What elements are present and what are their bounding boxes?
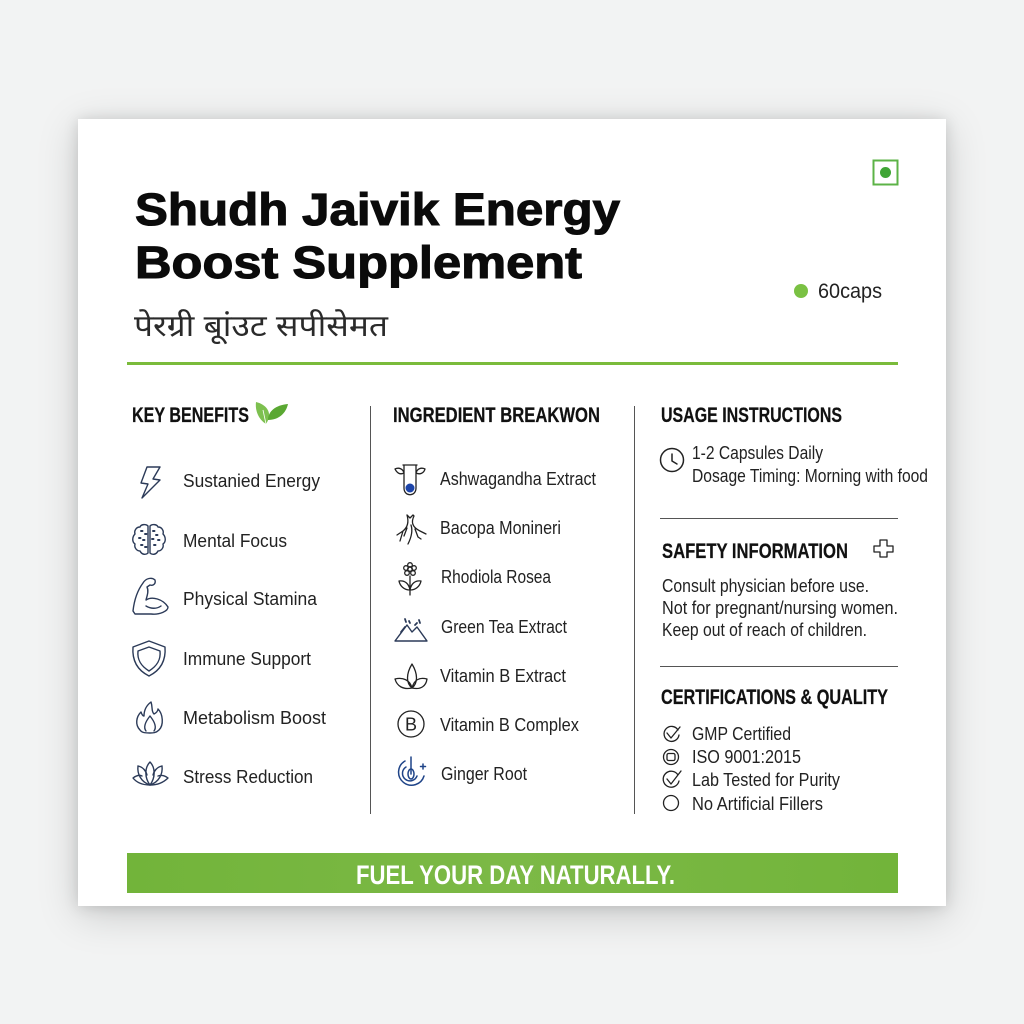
panel: ingredient breakdown — [393, 404, 600, 785]
banner: FUEL YOUR DAY NATURALLY. — [356, 860, 675, 890]
icon: iso seal — [664, 750, 678, 764]
cert: gmp: GMP Certified — [692, 723, 791, 744]
icon: lightning bolt — [141, 467, 160, 498]
heading: usage instructions: USAGE INSTRUCTIONS — [661, 404, 842, 427]
icon: ginger target — [399, 757, 426, 785]
usage text: Dosage Timing: Morning with food — [692, 465, 928, 486]
icon: flexed arm — [133, 578, 168, 614]
title — [135, 184, 620, 288]
heading: key benefits: KEY BENEFITS — [132, 404, 249, 427]
icon: leaves — [256, 402, 288, 424]
icon: vegetarian mark — [874, 160, 898, 184]
panel: safety information — [662, 540, 898, 640]
icon: roots — [397, 515, 426, 544]
icon: vitamin B circle: B — [405, 714, 417, 734]
panel: label card — [78, 119, 946, 906]
ingredient: vitamin b extract: Vitamin B Extract — [440, 665, 566, 686]
icon: medical cross — [874, 540, 893, 557]
icon: flask with leaves — [395, 465, 425, 495]
ingredient: vitamin b complex: Vitamin B Complex — [440, 714, 580, 735]
heading: ingredient breakdown: INGREDIENT BREAKWON — [393, 404, 600, 427]
safety text: Not for pregnant/nursing women. — [662, 597, 898, 618]
icon: check circle — [664, 726, 680, 741]
panel: key benefits — [132, 402, 326, 787]
capsule count: 60caps — [818, 280, 882, 303]
ingredient: green tea: Green Tea Extract — [441, 616, 567, 637]
icon: vitamin B circle — [398, 711, 424, 737]
cert: no fillers: No Artificial Fillers — [692, 793, 823, 814]
icon: mountains — [395, 619, 427, 641]
icon: empty circle — [664, 796, 678, 810]
banner — [127, 853, 898, 893]
ingredient: ginger root: Ginger Root — [441, 763, 527, 784]
subtitle in Hindi: पेरग्री बूांउट सपीसेमत — [134, 309, 389, 345]
benefit: sustained energy: Sustanied Energy — [183, 470, 321, 491]
ingredient: ashwagandha: Ashwagandha Extract — [440, 468, 596, 489]
ingredient: rhodiola: Rhodiola Rosea — [441, 566, 552, 587]
icon: check circle — [663, 771, 681, 787]
cert: lab tested: Lab Tested for Purity — [692, 769, 841, 790]
cert: iso: ISO 9001:2015 — [692, 746, 801, 767]
benefit: stress reduction: Stress Reduction — [183, 766, 313, 787]
title: Shudh Jaivik Energy — [135, 184, 620, 235]
benefit: mental focus: Mental Focus — [183, 530, 287, 551]
icon: clock — [660, 448, 684, 472]
ingredient: bacopa: Bacopa Monineri — [440, 517, 561, 538]
panel: certifications and quality — [661, 686, 888, 814]
benefit: physical stamina: Physical Stamina — [183, 588, 318, 609]
heading: certifications: CERTIFICATIONS & QUALITY — [661, 686, 888, 709]
usage text: 1-2 Capsules Daily — [692, 442, 824, 463]
capsule count — [794, 280, 882, 303]
safety text — [662, 575, 898, 640]
icon: shield — [133, 641, 165, 676]
panel: usage instructions — [660, 404, 928, 486]
benefit: metabolism boost: Metabolism Boost — [183, 707, 326, 728]
benefit: immune support: Immune Support — [183, 648, 311, 669]
icon: flame — [137, 702, 162, 733]
icon: flower — [399, 563, 421, 595]
icon: lotus — [133, 762, 168, 785]
usage text — [692, 442, 928, 486]
icon: brain — [133, 525, 165, 554]
safety text: Consult physician before use. — [662, 575, 869, 596]
title: Boost Supplement — [135, 237, 582, 288]
safety text: Keep out of reach of children. — [662, 619, 867, 640]
icon: three leaves — [395, 664, 427, 689]
heading: safety information: SAFETY INFORMATION — [662, 540, 848, 563]
